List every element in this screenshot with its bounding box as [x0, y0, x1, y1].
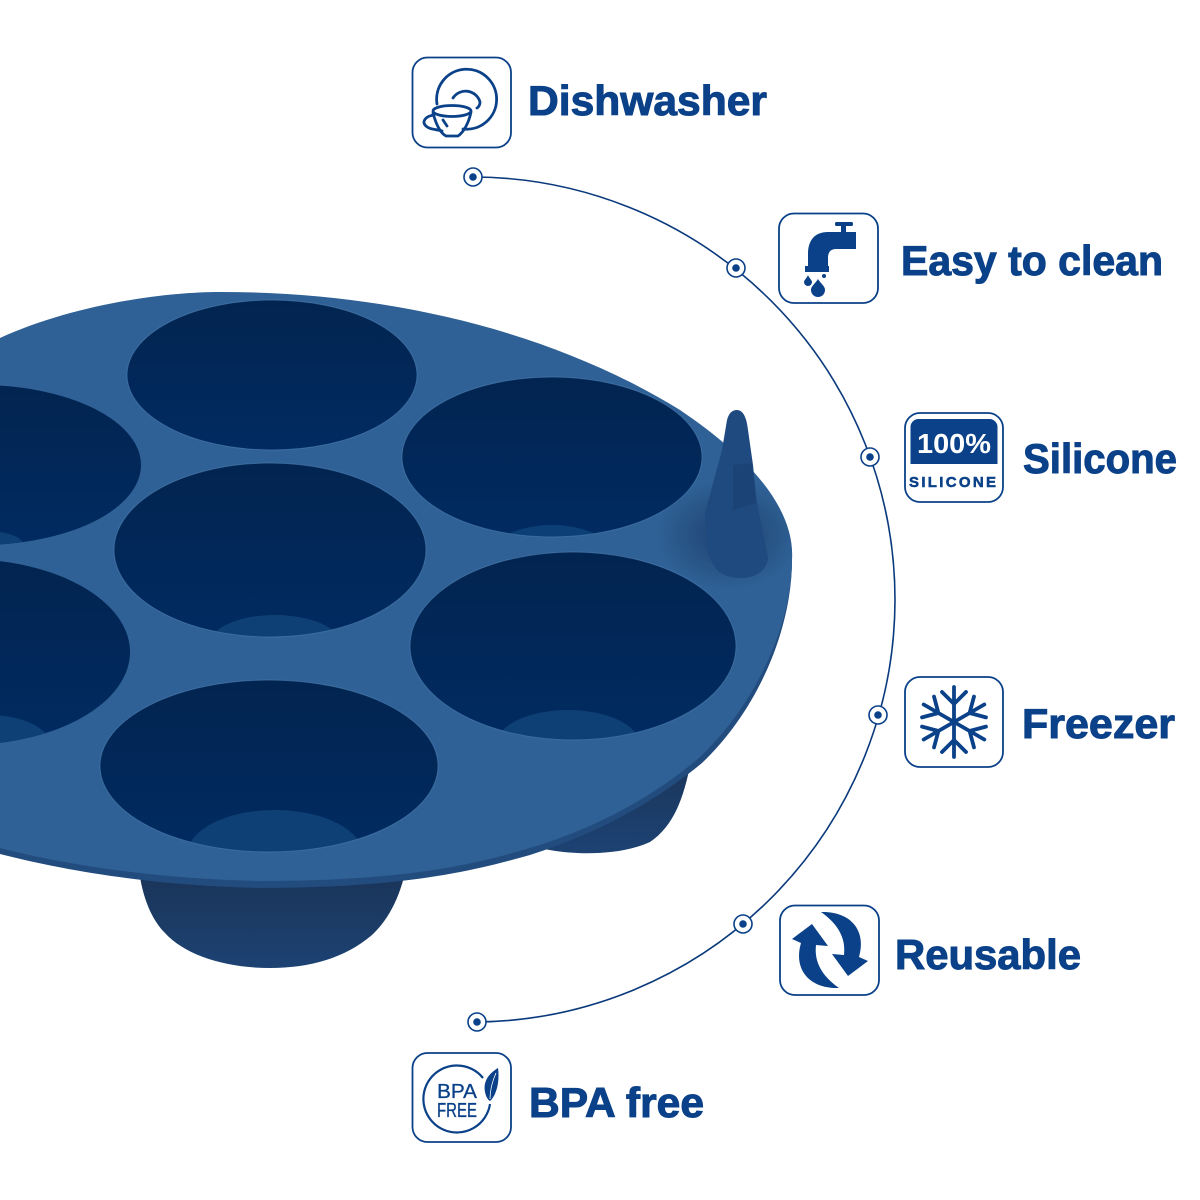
- cup: lower right: [410, 552, 736, 740]
- cup: upper left: [0, 386, 141, 544]
- label: BPA free: BPA free: [529, 1079, 704, 1126]
- connector node: dishwasher: [464, 168, 482, 186]
- icon: reusable arrows: [780, 906, 879, 995]
- icon: dishes: [412, 58, 511, 148]
- silicone muffin tray photo: [0, 292, 800, 968]
- cup: bottom: [100, 680, 438, 852]
- icon: BPA free leaf: BPA: [437, 1081, 478, 1103]
- tray top surface: [0, 292, 792, 881]
- label: Silicone: Silicone: [1023, 435, 1177, 482]
- icon: snowflake: [905, 677, 1003, 767]
- handle shadow: [671, 494, 789, 578]
- icon: BPA free leaf: FREE: [437, 1100, 477, 1122]
- label: Dishwasher: Dishwasher: [528, 77, 767, 124]
- cup: top: [127, 300, 417, 450]
- label: Freezer: Freezer: [1022, 700, 1175, 747]
- icon: BPA free leaf: [412, 1053, 511, 1142]
- icon: water tap: [779, 214, 878, 303]
- connector node: freezer: [869, 706, 887, 724]
- connector node: easy to clean: [727, 259, 745, 277]
- tray leg: right cup: [528, 755, 692, 853]
- icon: 100% silicone badge: [905, 413, 1003, 502]
- tray handle tab: [705, 410, 768, 578]
- connector node: reusable: [734, 915, 752, 933]
- label: Easy to clean: Easy to clean: [901, 237, 1163, 284]
- connector node: BPA free: [468, 1013, 486, 1031]
- icon: 100% silicone badge: 100%: [917, 428, 991, 459]
- cup: upper right: [402, 377, 702, 537]
- tray leg: bottom cup: [140, 877, 404, 968]
- icon: 100% silicone badge: SILICONE: [909, 474, 996, 491]
- cup: lower left: [0, 561, 130, 743]
- tray rim underside: [0, 560, 792, 888]
- label: Reusable: Reusable: [895, 931, 1081, 978]
- cup: middle: [114, 463, 426, 637]
- cup rim highlights: [100, 300, 736, 852]
- connector arc: [473, 177, 895, 1022]
- connector node: silicone: [861, 448, 879, 466]
